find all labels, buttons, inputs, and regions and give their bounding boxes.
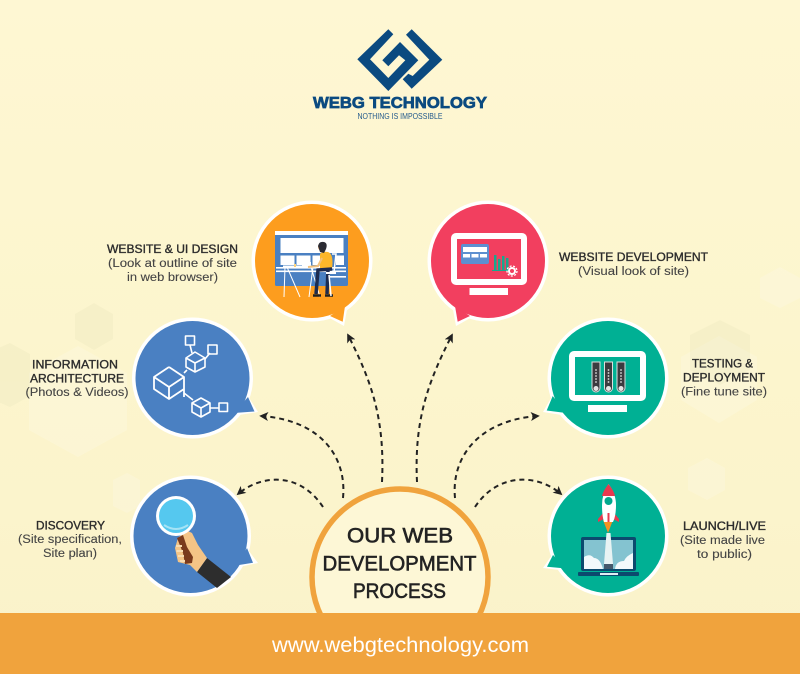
label: website and UI design: (Look at outline of site (108, 258, 237, 270)
label: launch (680, 521, 766, 561)
label: launch: LAUNCH/LIVE (683, 521, 766, 533)
label: information architecture: INFORMATION (32, 360, 118, 372)
panel: launch (543, 476, 668, 596)
footer bar (0, 613, 800, 674)
panel: information architecture (132, 318, 258, 438)
label: testing and deployment: DEPLOYMENT (683, 372, 765, 384)
arrow: to testing and deployment (455, 416, 538, 498)
logo tagline: NOTHING IS IMPOSSIBLE (358, 112, 442, 121)
panel: website development (428, 200, 548, 326)
label: discovery: Site plan) (43, 548, 97, 560)
label: testing and deployment: (Fine tune site) (681, 386, 767, 398)
logo (313, 29, 488, 121)
label: launch: (Site made live (680, 535, 765, 547)
arrow: to information architecture (261, 416, 343, 498)
arrow: to website and UI design (348, 335, 382, 482)
arrow: to launch (475, 480, 561, 507)
label: website development: (Visual look of site) (578, 266, 689, 278)
label: discovery: (Site specification, (18, 534, 122, 546)
logo name: WEBG TECHNOLOGY (313, 95, 488, 112)
arrow: to website development (417, 335, 452, 482)
label: launch: to public) (697, 549, 752, 561)
panel: website and UI design (252, 200, 372, 326)
label: website development (559, 252, 708, 278)
label: discovery: DISCOVERY (36, 520, 105, 532)
logo mark (357, 29, 442, 91)
label: website development: WEBSITE DEVELOPMENT (559, 252, 708, 264)
center title (322, 524, 477, 603)
panel: testing and deployment (543, 318, 668, 438)
label: information architecture: ARCHITECTURE (30, 374, 124, 386)
center title: DEVELOPMENT (322, 552, 477, 576)
center title: OUR WEB (347, 524, 453, 548)
icon: linked cubes (154, 336, 228, 417)
arrow: to discovery (238, 480, 323, 507)
icon: monitor with charts (454, 236, 524, 295)
label: testing and deployment (681, 358, 767, 398)
icon: rocket launching from laptop (578, 484, 639, 576)
label: discovery (18, 520, 122, 560)
panel: discovery (130, 476, 258, 596)
center circle (312, 489, 488, 665)
center title: PROCESS (353, 580, 446, 603)
icon: hand holding magnifier (156, 496, 231, 588)
label: information architecture: (Photos & Videos) (26, 387, 129, 399)
icon: designer at desk (275, 231, 348, 297)
label: website and UI design: in web browser) (127, 272, 218, 284)
label: website and UI design: WEBSITE & UI DESIGN (107, 244, 238, 256)
label: information architecture (26, 360, 129, 399)
label: testing and deployment: TESTING & (692, 358, 753, 370)
label: website and UI design (107, 244, 238, 284)
website url: www.webgtechnology.com (271, 634, 529, 657)
icon: monitor with test tubes (572, 354, 643, 412)
